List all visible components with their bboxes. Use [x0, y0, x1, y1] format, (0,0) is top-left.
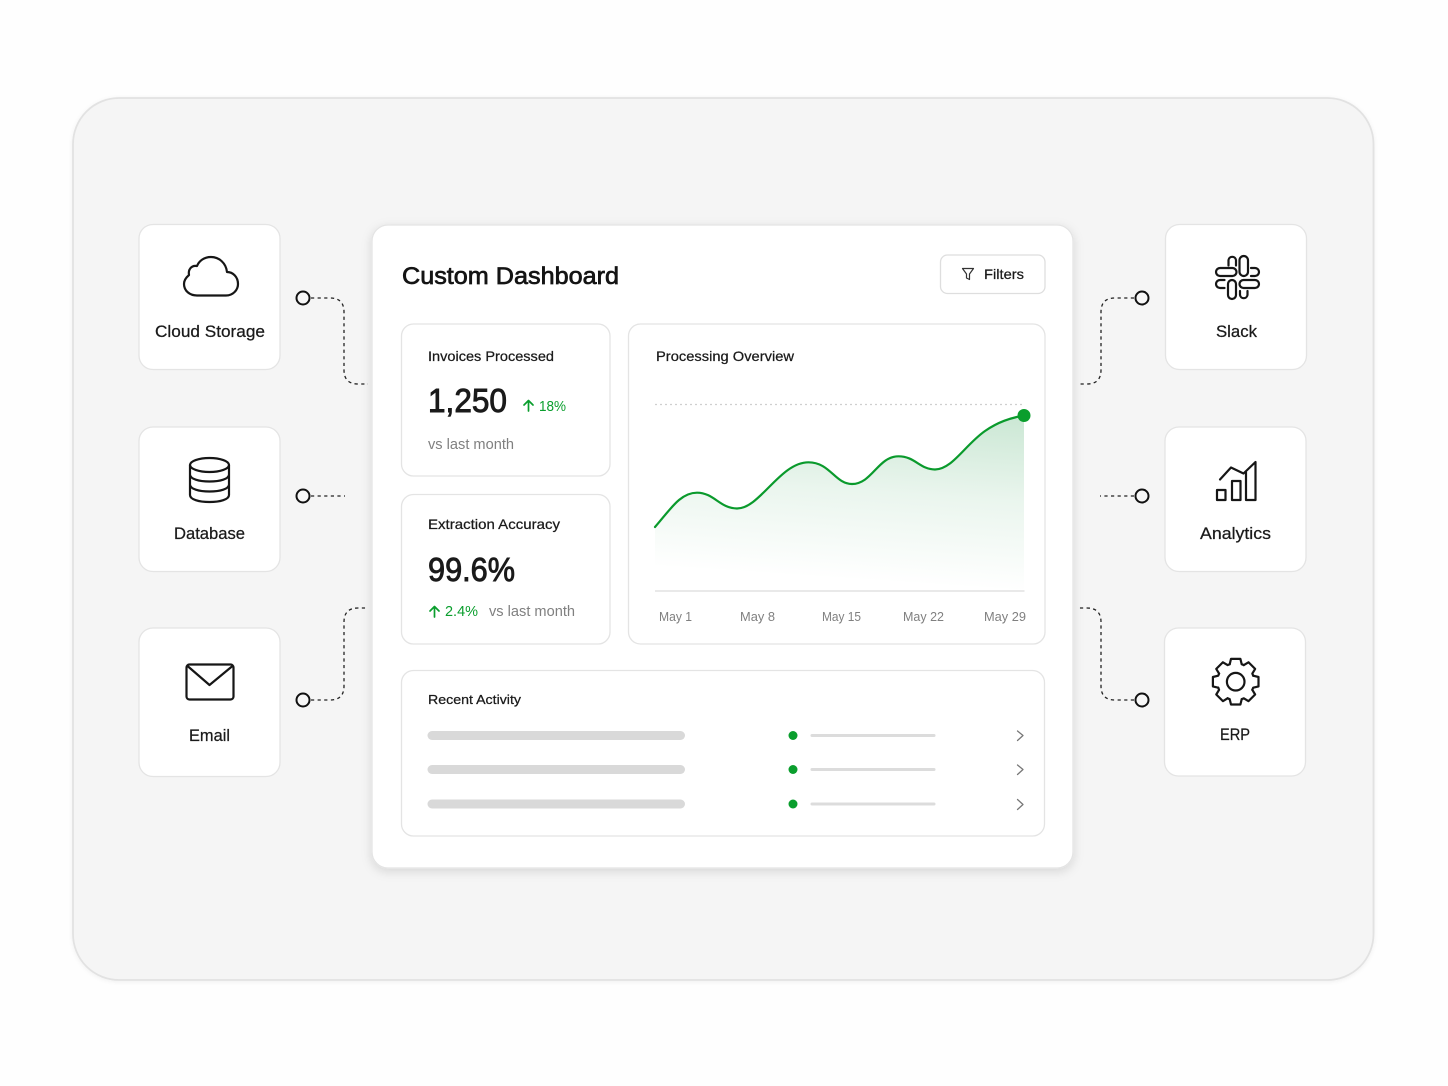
- connector: erp to dashboard: [1077, 608, 1148, 706]
- panel: custom dashboard: [372, 225, 1073, 868]
- panel: invoices processed: [402, 324, 610, 476]
- icon: up arrow: [430, 606, 439, 617]
- card: slack: [1166, 224, 1306, 370]
- icon: cloud: [184, 257, 238, 296]
- title: Custom Dashboard: [402, 263, 619, 290]
- panel: recent activity: [402, 670, 1044, 836]
- card: analytics: [1165, 427, 1306, 572]
- card: database: [139, 427, 280, 572]
- label: cloud storage: Cloud Storage: [155, 322, 265, 341]
- value: 1,250: 1,250: [428, 382, 507, 419]
- caption: vs last month: vs last month: [489, 604, 575, 620]
- x axis labels: [659, 610, 1026, 624]
- icon: envelope: [186, 664, 234, 700]
- label: slack: Slack: [1216, 322, 1257, 341]
- value: 99.6%: 99.6%: [428, 551, 515, 588]
- connector: database to dashboard: [296, 490, 345, 502]
- change: 2.4%: 2.4%: [445, 604, 478, 620]
- x axis labels: May 15: [822, 610, 861, 624]
- heading: extraction accuracy: Extraction Accuracy: [428, 516, 560, 532]
- heading: invoices processed: Invoices Processed: [428, 348, 554, 364]
- label: database: Database: [174, 524, 245, 543]
- connector: slack to dashboard: [1079, 292, 1148, 384]
- panel: outer background: [73, 98, 1374, 980]
- connector: cloud storage to dashboard: [296, 292, 368, 384]
- caption: vs last month: vs last month: [428, 437, 514, 453]
- activity row 1: [428, 731, 1023, 740]
- card: erp: [1164, 628, 1306, 776]
- icon: gear: [1213, 659, 1258, 704]
- heading: processing overview: Processing Overview: [656, 348, 795, 364]
- x axis labels: May 29: [984, 610, 1026, 624]
- label: filters: Filters: [984, 266, 1024, 282]
- panel: extraction accuracy: [402, 494, 610, 644]
- x axis labels: May 1: [659, 610, 692, 624]
- icon: database: [190, 458, 229, 502]
- button: filters: [940, 255, 1045, 294]
- card: email: [139, 628, 280, 776]
- activity row 2: [428, 765, 1023, 774]
- label: erp: ERP: [1220, 725, 1250, 744]
- change: 18%: 18%: [539, 399, 566, 415]
- panel: processing overview: [628, 324, 1045, 644]
- icon: funnel: [962, 268, 974, 280]
- label: email: Email: [189, 726, 230, 745]
- connector: analytics to dashboard: [1100, 490, 1148, 502]
- x axis labels: May 8: [740, 610, 775, 624]
- connector: email to dashboard: [296, 608, 368, 706]
- card: cloud storage: [139, 224, 280, 370]
- x axis labels: May 22: [903, 610, 944, 624]
- label: analytics: Analytics: [1200, 524, 1271, 543]
- icon: up arrow: [524, 400, 533, 411]
- area line chart: [655, 404, 1030, 591]
- activity row 3: [428, 800, 1023, 810]
- icon: bar chart with trend line: [1217, 462, 1256, 500]
- heading: recent activity: Recent Activity: [428, 692, 522, 707]
- icon: slack: [1216, 256, 1259, 299]
